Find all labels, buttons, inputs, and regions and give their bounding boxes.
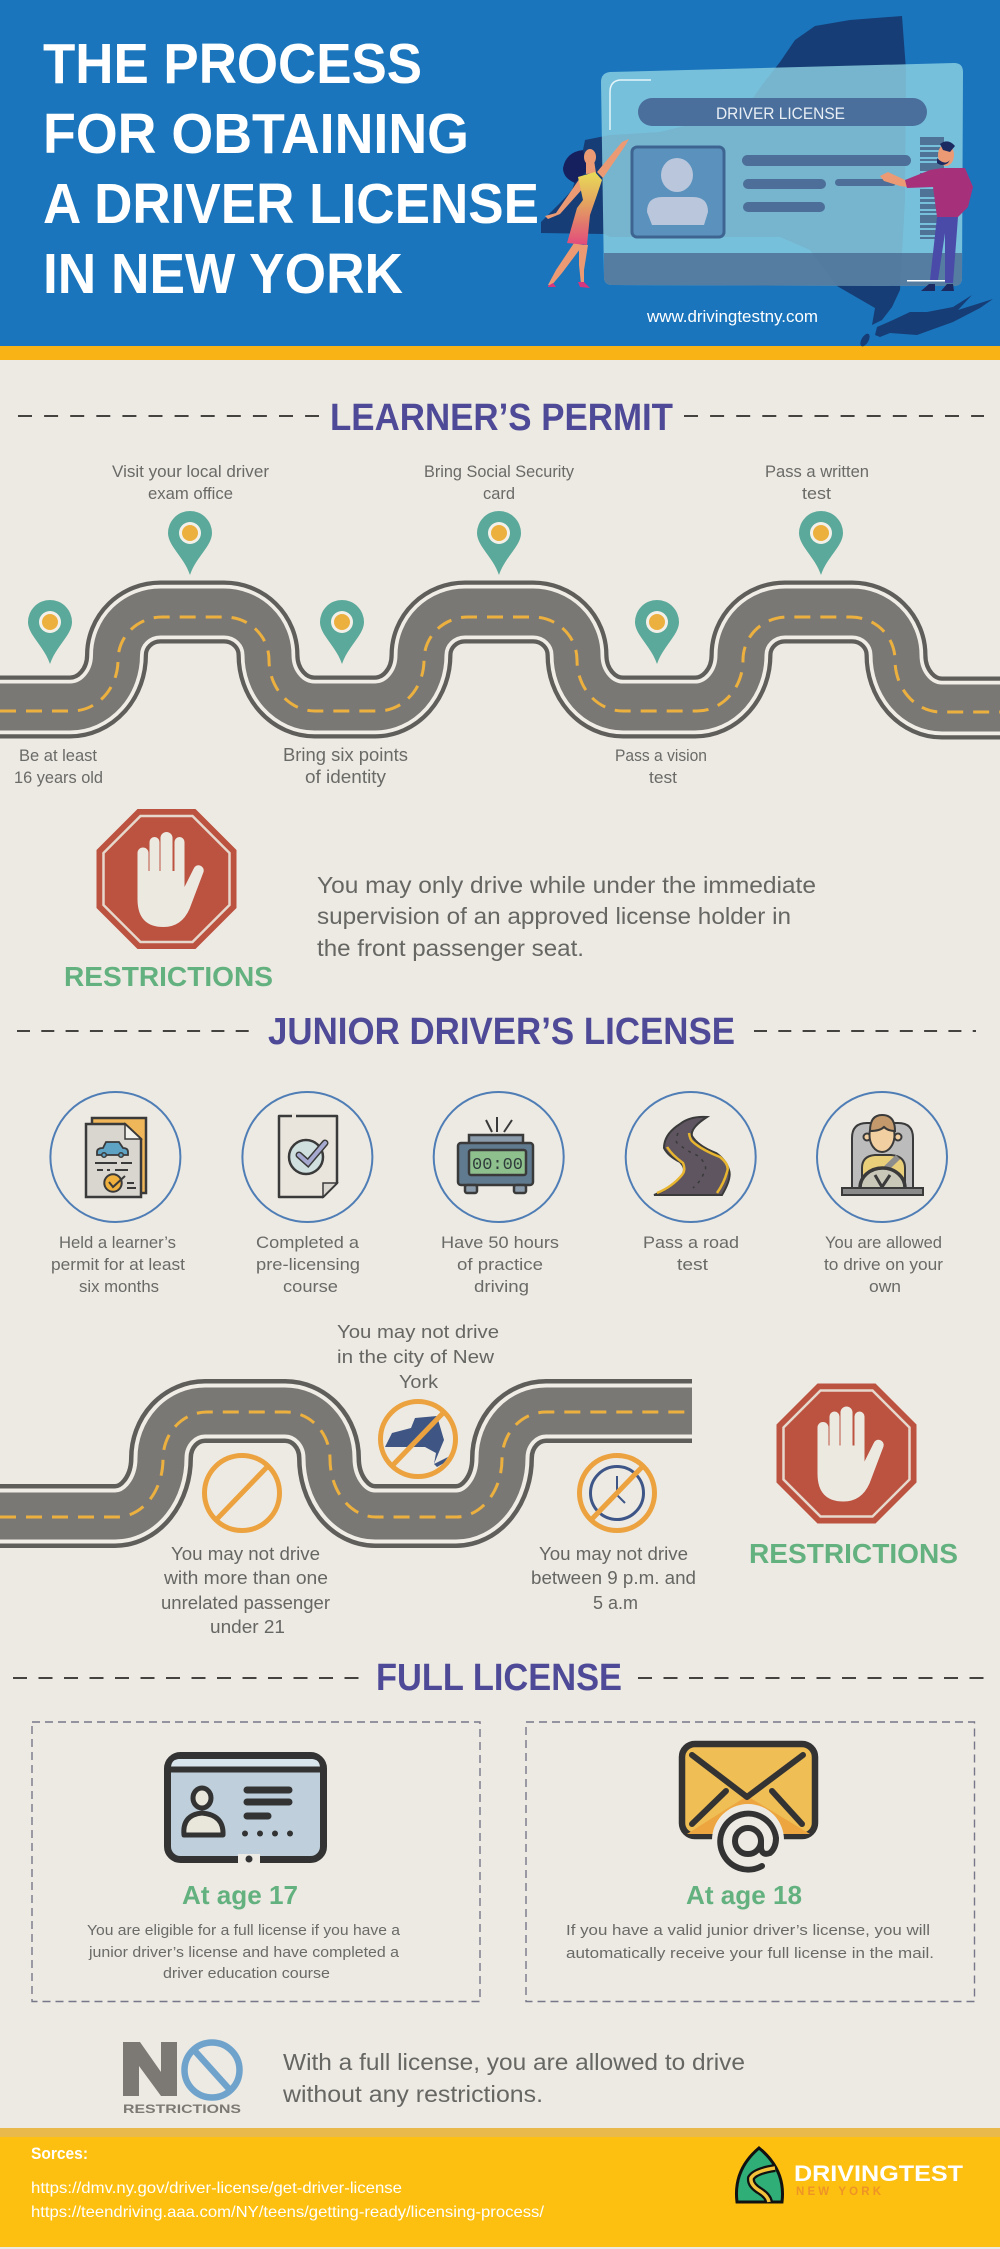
requirement: practice hours: [434, 1092, 564, 1296]
text: of practice: [457, 1256, 543, 1274]
text: Completed a: [256, 1234, 360, 1252]
pin: identity: [320, 600, 364, 664]
subheading: At age 17: [182, 1880, 298, 1910]
road: learner's permit: [0, 612, 1000, 712]
step: social security: Bring Social Security: [424, 463, 575, 481]
icon: digital clock: 00:00: [472, 1156, 523, 1175]
text: no restrictions: [282, 2049, 745, 2107]
sources: https://teendriving.aaa.com/NY/teens/getting-ready/licensing-process/: [31, 2204, 545, 2221]
logo: NEW YORK: [796, 2186, 882, 2198]
icon: no passenger: [204, 1456, 280, 1530]
text: no New York City: [337, 1322, 499, 1392]
icon: driver: [842, 1115, 923, 1195]
header banner: [0, 0, 1000, 360]
illustration: New York state map: [541, 16, 993, 348]
text: [566, 1923, 934, 1962]
icon: certificate: [279, 1113, 337, 1197]
title: FOR OBTAINING: [43, 102, 469, 166]
text: [643, 1234, 739, 1274]
step: identity: Bring six points: [283, 745, 408, 765]
heading: junior driver's license: JUNIOR DRIVER’S LICENSE: [268, 1011, 735, 1053]
illustration: license card: DRIVER LICENSE: [716, 105, 845, 123]
step: written test: test: [802, 485, 831, 503]
text: no night driving: between 9 p.m. and: [531, 1568, 696, 1588]
step: exam office: exam office: [148, 485, 233, 503]
step: social security: card: [483, 485, 515, 503]
text: If you have a valid junior driver’s license, you will: [566, 1923, 930, 1939]
title: THE PROCESS: [43, 32, 422, 96]
requirement: road test: [626, 1092, 756, 1274]
text: driving: [474, 1278, 529, 1296]
panel: age 17: [32, 1722, 480, 2002]
text: no restrictions: With a full license, you are allowed to drive: [283, 2049, 745, 2075]
text: no passenger: You may not drive: [171, 1544, 320, 1564]
text: [824, 1234, 944, 1296]
text: You are allowed: [825, 1234, 942, 1252]
icon: no restrictions: RESTRICTIONS: [123, 2103, 241, 2116]
title: [43, 32, 539, 306]
icon: no New York City: [380, 1402, 456, 1476]
icon: no night driving: [580, 1456, 654, 1530]
text: [87, 1923, 401, 1982]
text: permit restriction: supervision of an approved license holder in: [317, 903, 791, 929]
step: age: [14, 747, 103, 787]
text: no New York City: York: [399, 1372, 439, 1392]
pin: social security: [477, 511, 521, 575]
icon: envelope with at sign: [682, 1744, 815, 1876]
text: no New York City: You may not drive: [337, 1322, 499, 1342]
text: permit for at least: [51, 1256, 185, 1274]
step: written test: [765, 463, 869, 503]
sources: [31, 2144, 545, 2221]
text: permit restriction: You may only drive while under the immediate: [317, 872, 816, 898]
step: written test: Pass a written: [765, 463, 869, 481]
step: vision: [615, 747, 707, 787]
text: You are eligible for a full license if you have a: [87, 1923, 401, 1939]
text: six months: [79, 1278, 159, 1296]
icon: no restrictions: [123, 2042, 241, 2116]
text: course: [283, 1278, 338, 1296]
website: www.drivingtestny.com: [646, 307, 818, 326]
panel: age 18: [526, 1722, 974, 2002]
step: social security: [424, 463, 575, 503]
label: restrictions: RESTRICTIONS: [64, 961, 273, 992]
text: pre-licensing: [256, 1256, 360, 1274]
step: vision: test: [649, 769, 677, 787]
logo: DRIVINGTEST: [794, 2161, 964, 2186]
label: restrictions: RESTRICTIONS: [749, 1538, 958, 1569]
text: test: [677, 1256, 708, 1274]
sources: Sorces:: [31, 2144, 88, 2163]
text: Have 50 hours: [441, 1234, 559, 1252]
text: no night driving: [531, 1544, 696, 1613]
text: no restrictions: without any restrictions.: [282, 2081, 543, 2107]
text: no passenger: [161, 1544, 330, 1637]
step: identity: of identity: [305, 767, 386, 787]
text: [256, 1234, 360, 1296]
road: junior license: [0, 1411, 692, 1517]
requirement: pre-licensing course: [242, 1092, 372, 1296]
pin: vision: [635, 600, 679, 664]
title: IN NEW YORK: [43, 242, 403, 306]
pin: written test: [799, 511, 843, 575]
step: exam office: [112, 463, 270, 503]
heading: learner's permit: LEARNER’S PERMIT: [330, 397, 673, 439]
pin: age: [28, 600, 72, 664]
text: permit restriction: the front passenger seat.: [317, 935, 584, 961]
requirement: learner's permit document: [50, 1092, 185, 1296]
step: age: Be at least: [19, 747, 97, 765]
text: no passenger: under 21: [210, 1617, 285, 1637]
text: junior driver’s license and have completed a: [88, 1945, 400, 1961]
heading: full license: FULL LICENSE: [376, 1657, 622, 1699]
text: [441, 1234, 559, 1296]
step: identity: [283, 745, 408, 787]
icon: stop sign with hand: [776, 1384, 916, 1524]
text: [51, 1234, 185, 1296]
text: no night driving: 5 a.m: [593, 1593, 638, 1613]
icon: document: [86, 1118, 146, 1197]
text: to drive on your: [824, 1256, 944, 1274]
text: no night driving: You may not drive: [539, 1544, 688, 1564]
subheading: At age 18: [686, 1880, 802, 1910]
requirement: drive alone: [817, 1092, 947, 1296]
text: no passenger: with more than one: [163, 1568, 328, 1588]
text: permit restriction: [317, 872, 816, 961]
step: vision: Pass a vision: [615, 747, 707, 765]
text: own: [869, 1278, 901, 1296]
illustration: woman: [545, 139, 629, 288]
icon: id card: [167, 1756, 324, 1864]
title: A DRIVER LICENSE: [43, 172, 539, 236]
icon: winding road: [654, 1117, 730, 1195]
text: no passenger: unrelated passenger: [161, 1593, 330, 1613]
step: exam office: Visit your local driver: [112, 463, 270, 481]
illustration: man: [880, 141, 973, 291]
pin: exam office: [168, 511, 212, 575]
logo: [736, 2148, 964, 2202]
text: Held a learner’s: [59, 1234, 176, 1252]
text: automatically receive your full license in the mail.: [566, 1946, 934, 1962]
step: age: 16 years old: [14, 769, 103, 787]
icon: digital clock: [458, 1117, 533, 1193]
icon: stop sign with hand: [96, 809, 236, 949]
text: no New York City: in the city of New: [337, 1347, 495, 1367]
footer: [0, 2128, 1000, 2247]
illustration: license card: [601, 63, 963, 286]
text: driver education course: [163, 1966, 330, 1982]
sources: https://dmv.ny.gov/driver-license/get-driver-license: [31, 2180, 402, 2197]
text: Pass a road: [643, 1234, 739, 1252]
